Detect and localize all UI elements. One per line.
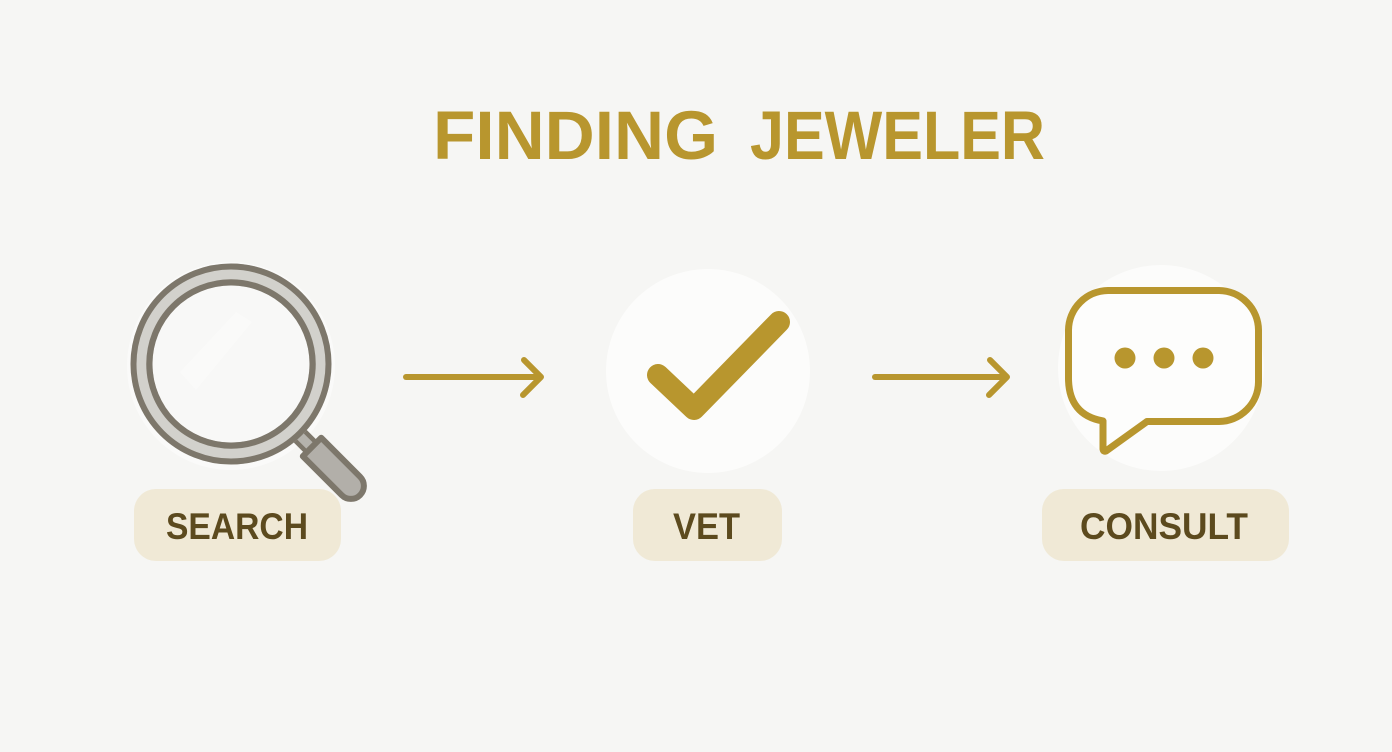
title: FINDING [433,97,718,174]
label pill: search [134,489,341,561]
label pill: search: SEARCH [166,506,308,547]
arrow: search to vet [406,360,541,395]
icon: magnifying glass [127,262,369,504]
icon: speech bubble [1058,265,1264,471]
icon: check mark in circle [606,269,810,473]
step 3: consult [1042,265,1289,561]
label pill: consult [1042,489,1289,561]
label pill: consult: CONSULT [1080,506,1248,547]
title [433,97,1045,174]
arrow: vet to consult [875,360,1007,395]
label pill: vet: VET [673,506,740,547]
step 2: vet [606,269,810,561]
label pill: vet [633,489,782,561]
step 1: search [127,262,369,561]
title: JEWELER [750,97,1045,174]
